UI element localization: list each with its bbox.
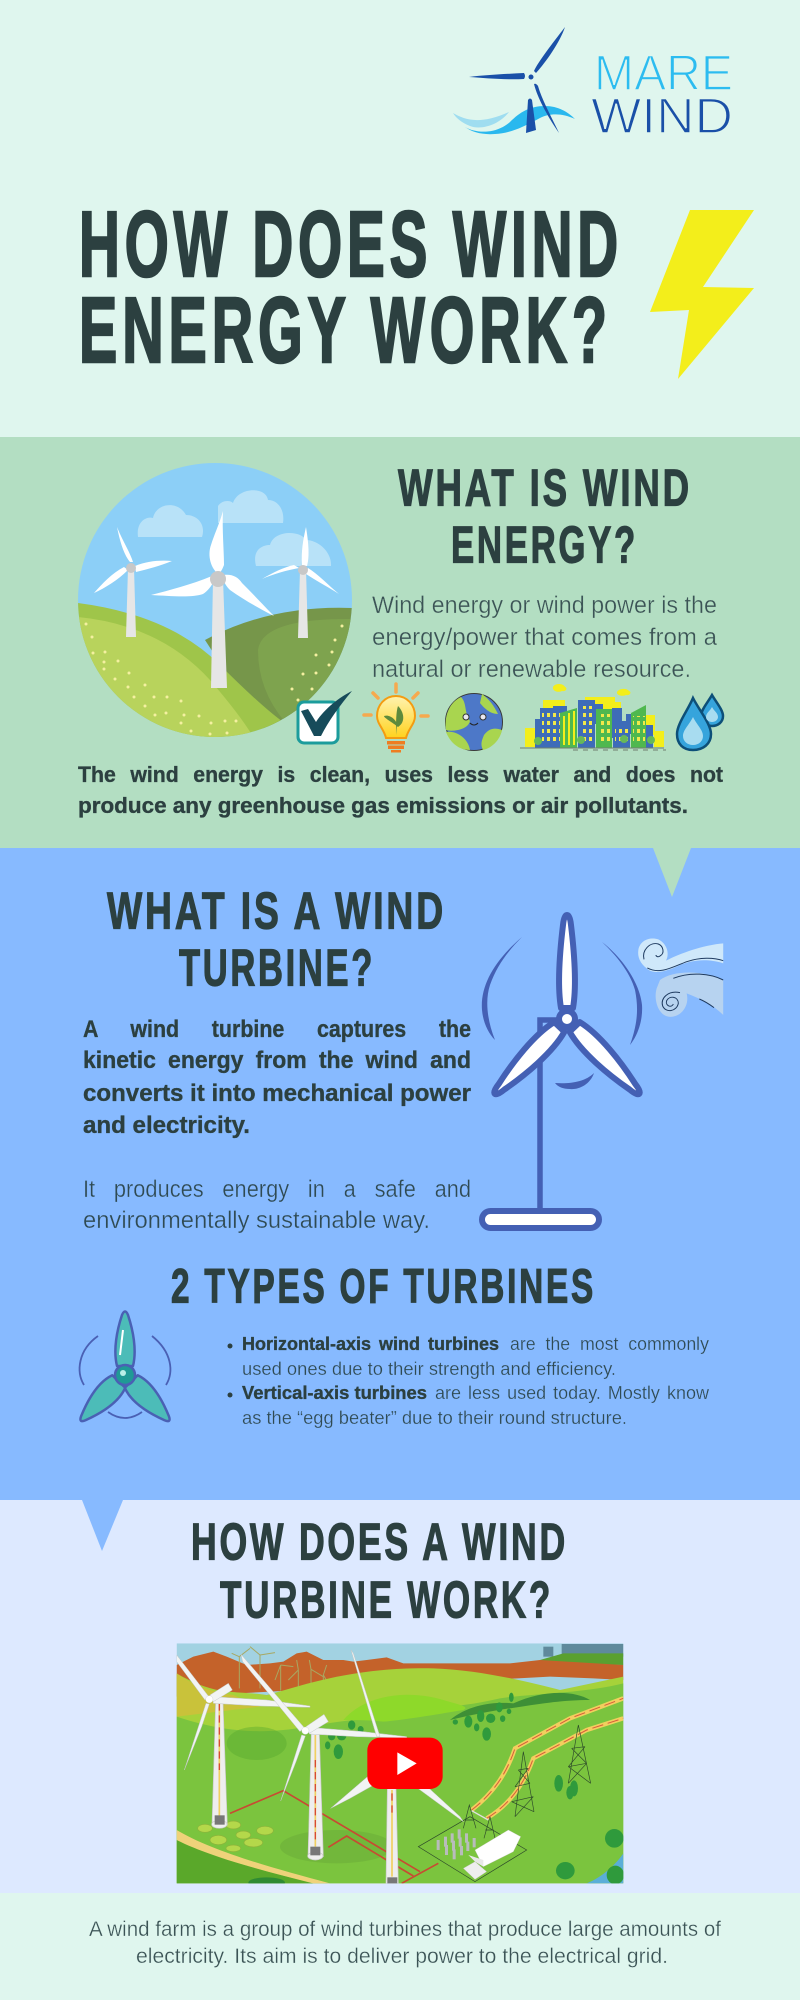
title [79, 192, 623, 382]
panel: what is a wind turbine [0, 848, 800, 1500]
text: benefits: produce any greenhouse gas emissions or air pollutants. [78, 793, 688, 818]
heading: how does a wind turbine work: HOW DOES A WIND [191, 1514, 568, 1572]
text: turbine types list: are less used today. Mostly know [435, 1383, 710, 1403]
text: turbine types list [228, 1334, 710, 1428]
text: turbine definition: A wind turbine captures the [83, 1016, 471, 1043]
text: sustainable way: It produces energy in a safe and [83, 1176, 471, 1203]
text: definition: natural or renewable resource. [372, 656, 691, 683]
heading: how does a wind turbine work: TURBINE WORK? [220, 1572, 553, 1630]
arrow: blue notch [82, 1500, 123, 1551]
icon: play button [367, 1738, 443, 1789]
arrow: green notch [653, 848, 691, 897]
icon: light bulb [364, 684, 428, 752]
icon: small teal turbine [73, 1312, 177, 1429]
heading: what is wind energy [398, 460, 692, 574]
text: benefits: The wind energy is clean, uses less water and does not [78, 762, 724, 787]
heading: what is a wind turbine [107, 882, 446, 998]
text: definition: energy/power that comes from a [372, 624, 718, 651]
text: wind farm description [89, 1918, 721, 1968]
panel: what is wind energy [0, 437, 800, 848]
icon: wind swirls [638, 938, 723, 1017]
text: sustainable way [83, 1176, 471, 1234]
illustration: wind farm landscape [78, 463, 352, 745]
heading: what is a wind turbine: TURBINE? [179, 940, 375, 998]
text: sustainable way: environmentally sustainable way. [83, 1207, 430, 1234]
logo: Mare Wind: WIND [591, 88, 733, 144]
logo: Mare Wind: MARE [594, 45, 733, 101]
video thumbnail [177, 1643, 624, 1888]
heading: how does a wind turbine work [191, 1514, 568, 1630]
icon: water drops [677, 695, 723, 750]
text: benefits [78, 762, 724, 818]
icon: check mark [298, 691, 352, 743]
text: turbine types list: Vertical-axis turbines [242, 1383, 427, 1403]
text: wind farm description: electricity. Its aim is to deliver power to the electrical grid. [136, 1945, 668, 1968]
logo: Mare Wind [453, 27, 733, 144]
icon: smiling earth [446, 694, 502, 750]
text: turbine definition [83, 1016, 471, 1139]
text: turbine types list: as the “egg beater” due to their round structure. [242, 1408, 627, 1428]
heading: 2 types of turbines: 2 TYPES OF TURBINES [171, 1260, 596, 1314]
icon: lightning bolt [650, 210, 754, 379]
heading: what is wind energy: ENERGY? [451, 516, 638, 574]
text: turbine types list: used ones due to their strength and efficiency. [242, 1359, 616, 1379]
text: wind farm description: A wind farm is a group of wind turbines that produce large amounts of [89, 1918, 721, 1941]
text: definition [372, 592, 718, 683]
icon: large wind turbine [482, 915, 646, 1228]
text: turbine definition: converts it into mechanical power [83, 1080, 471, 1107]
text: turbine definition: and electricity. [83, 1112, 250, 1139]
text: turbine types list: Horizontal-axis wind turbines [242, 1334, 499, 1354]
icon: green city [520, 684, 666, 750]
text: turbine definition: kinetic energy from the wind and [83, 1047, 471, 1074]
panel: header [0, 0, 800, 437]
text: definition: Wind energy or wind power is the [372, 592, 717, 619]
text: turbine types list: are the most commonly [510, 1334, 709, 1354]
panel: how does a wind turbine work [0, 1500, 800, 1893]
heading: what is a wind turbine: WHAT IS A WIND [107, 882, 446, 940]
panel: footer [0, 1893, 800, 2000]
